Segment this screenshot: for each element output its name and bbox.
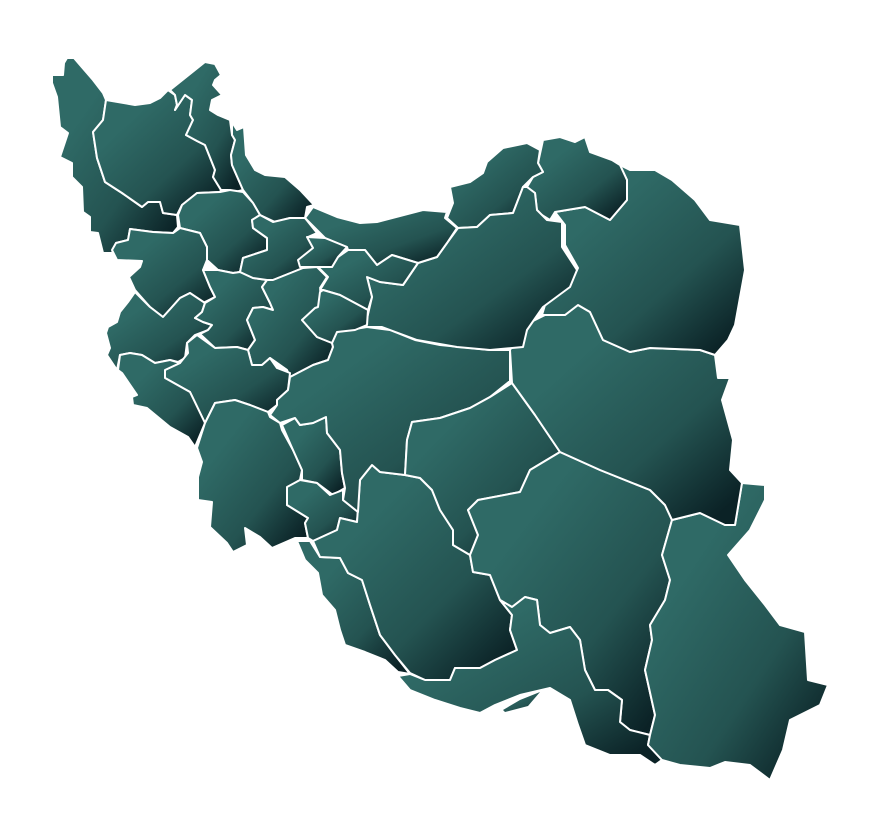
province: Kermanshah <box>106 292 212 370</box>
province: Kurdistan <box>112 228 215 317</box>
province: Zanjan <box>178 190 267 273</box>
province: Qom <box>302 290 368 343</box>
province: Razavi Khorasan <box>542 165 745 355</box>
province: Fars <box>313 465 517 680</box>
island: Qeshm <box>503 692 540 712</box>
province: East Azerbaijan <box>93 90 221 215</box>
province: Tehran <box>318 250 418 310</box>
province: Qazvin <box>240 215 317 280</box>
province: North Khorasan <box>527 137 627 220</box>
province: Markazi <box>247 267 333 377</box>
province: Khuzestan <box>197 400 308 552</box>
province: Kohgiluyeh and Boyer-Ahmad <box>287 480 358 541</box>
province: Sistan and Baluchestan <box>645 483 828 780</box>
province: Hormozgan <box>398 597 662 765</box>
province: Mazandaran <box>305 207 457 265</box>
province: Golestan <box>447 143 543 228</box>
province: Gilan <box>231 122 314 222</box>
province: Semnan <box>365 187 577 350</box>
province: Bushehr <box>297 541 410 674</box>
province: Hamadan <box>195 270 273 350</box>
province: Isfahan <box>270 327 510 512</box>
province: West Azerbaijan <box>52 58 178 253</box>
province: Chaharmahal and Bakhtiari <box>282 417 345 495</box>
province: Yazd <box>405 383 560 555</box>
province: Ardabil <box>170 62 243 192</box>
province: Kerman <box>468 452 672 735</box>
province: Alborz <box>298 237 347 267</box>
province: South Khorasan <box>510 305 742 525</box>
province: Lorestan <box>165 335 290 423</box>
province: Ilam <box>118 353 205 447</box>
